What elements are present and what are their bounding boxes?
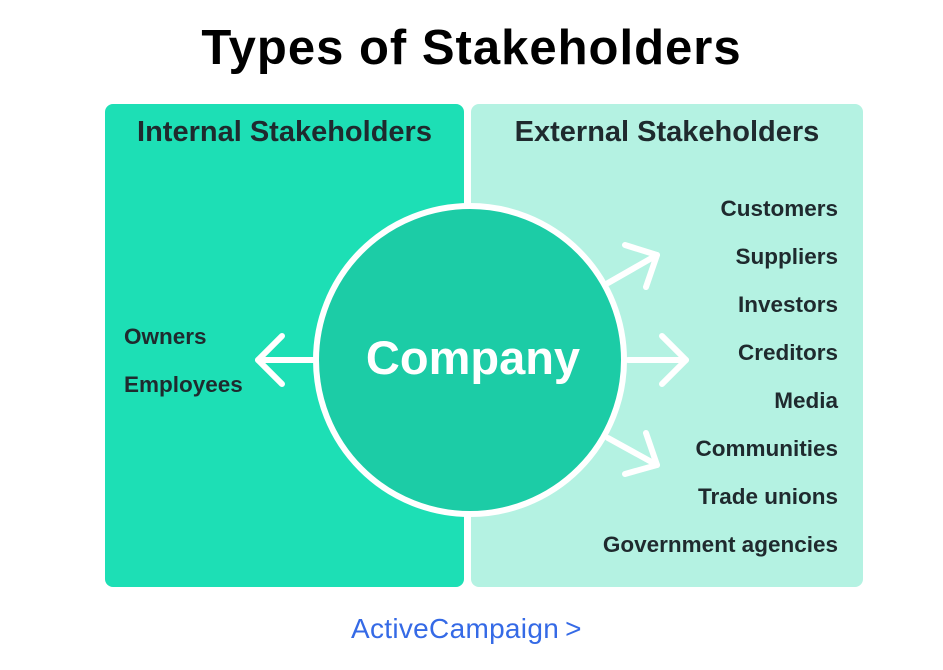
arrow: up-right — [608, 245, 657, 287]
circle: company: Company — [366, 331, 580, 384]
arrow: right — [628, 336, 686, 384]
internal list: Employees — [124, 372, 243, 397]
external list: Media — [774, 388, 838, 413]
external list — [603, 196, 838, 557]
panel: internal — [105, 104, 464, 587]
internal list — [124, 324, 243, 397]
logo: ActiveCampaign: ActiveCampaign> — [351, 613, 582, 644]
internal list: Owners — [124, 324, 207, 349]
external list: Creditors — [738, 340, 838, 365]
external list: Government agencies — [603, 532, 838, 557]
external list: Customers — [720, 196, 838, 221]
title: Types of Stakeholders — [201, 21, 742, 75]
circle: company — [316, 206, 624, 514]
heading: external: External Stakeholders — [515, 116, 819, 148]
external list: Communities — [695, 436, 838, 461]
arrow: left — [258, 336, 314, 384]
arrow: down-right — [608, 433, 657, 474]
heading: internal: Internal Stakeholders — [137, 116, 432, 148]
external list: Investors — [738, 292, 838, 317]
external list: Trade unions — [698, 484, 838, 509]
panel: external — [471, 104, 863, 587]
external list: Suppliers — [735, 244, 838, 269]
